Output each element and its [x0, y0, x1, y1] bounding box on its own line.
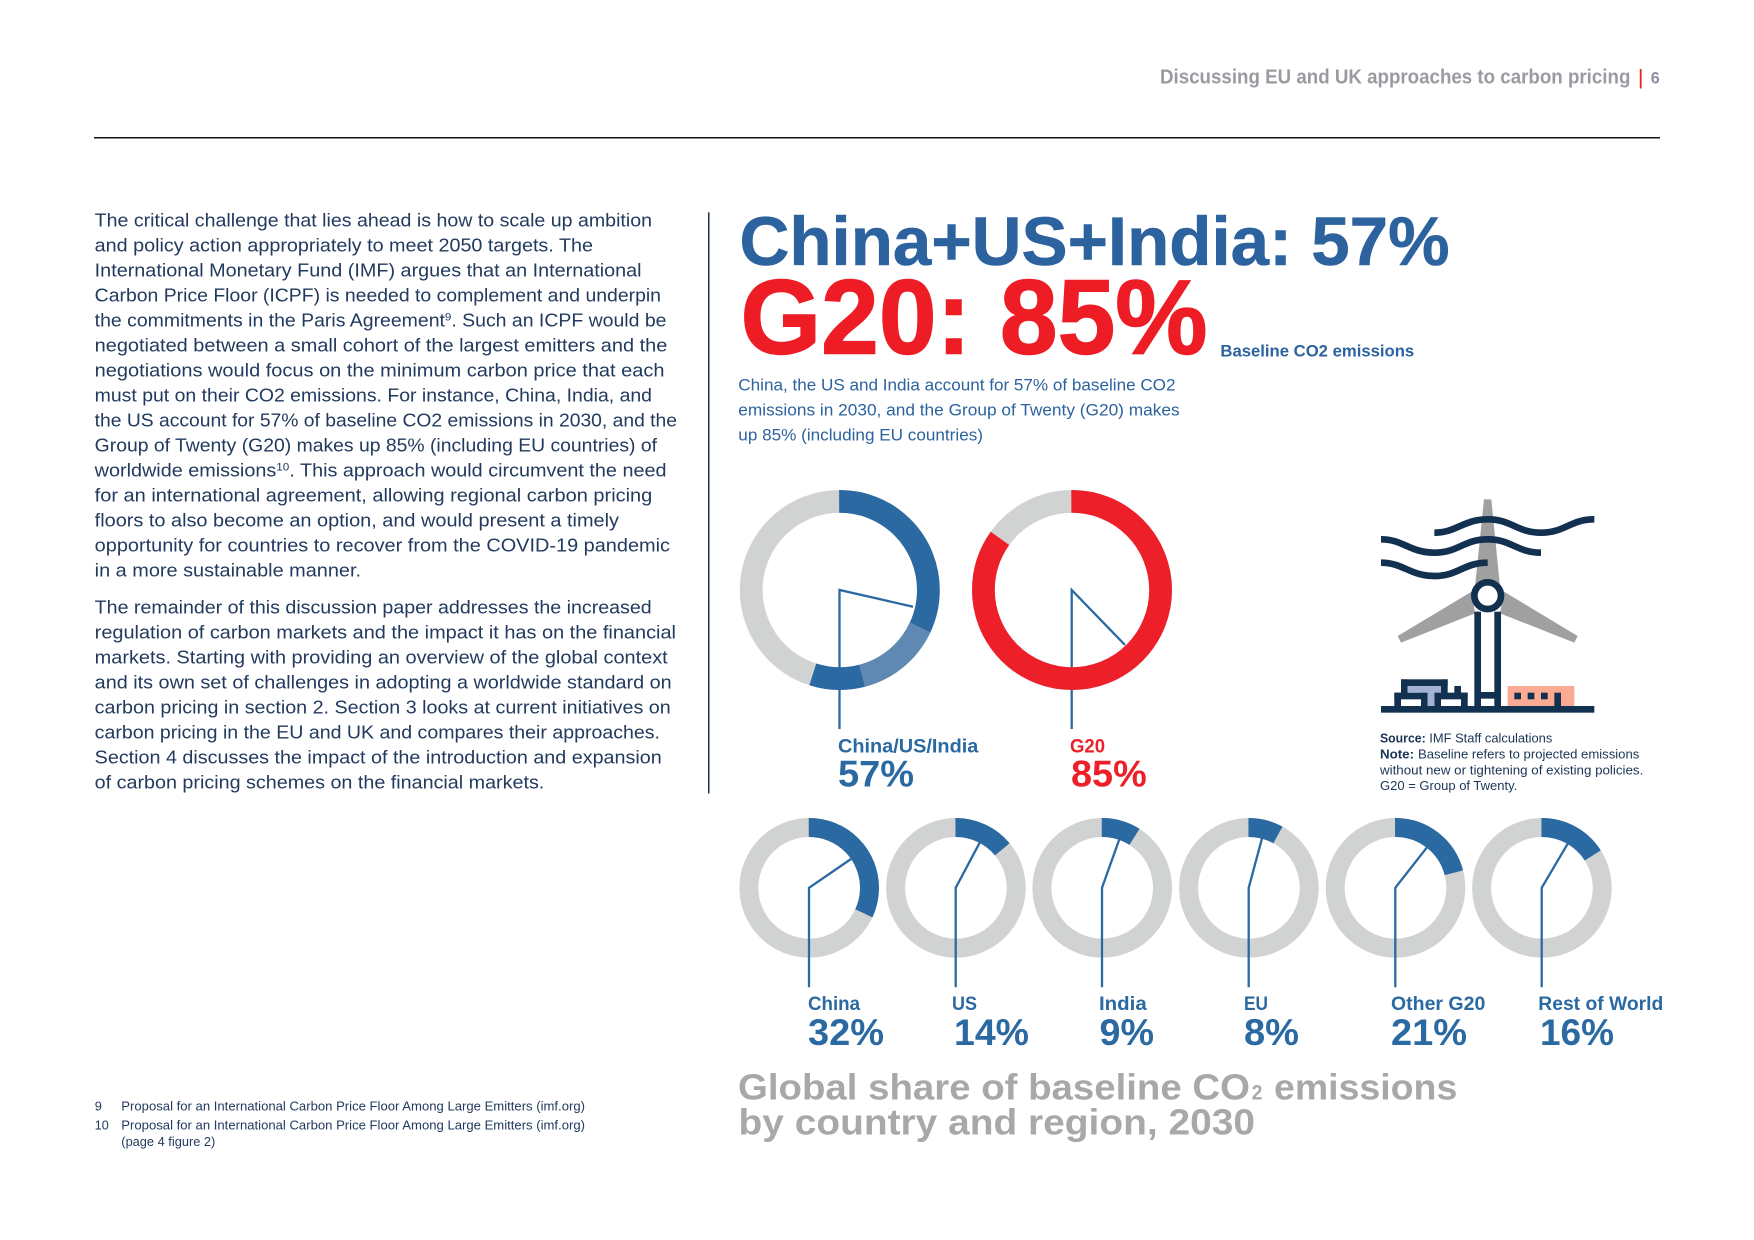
small donut: Other G20 21%: Other G20	[1391, 994, 1485, 1015]
chart title: Global share of baseline CO2 emissions by country and region, 2030: by country and region, 2030	[738, 1101, 1255, 1142]
footnotes: 9	[95, 1099, 102, 1114]
small donut: China 32%	[749, 828, 884, 1053]
text block: first paragraph	[94, 210, 677, 581]
small donut: Rest of World 16%	[1482, 828, 1663, 1053]
chart title: Global share of baseline CO2 emissions by country and region, 2030: emissions	[1274, 1066, 1457, 1107]
text block: second paragraph: The remainder of this discussion paper addresses the increased	[95, 596, 652, 617]
label: China/US/India 57%	[838, 736, 979, 795]
text block: first paragraph: worldwide emissions	[95, 460, 265, 481]
small donut: EU 8%	[1189, 828, 1309, 1053]
text block: first paragraph: opportunity for countries to recover from the COVID-19 pandemic	[95, 535, 670, 556]
text block: second paragraph: carbon pricing in section 2. Section 3 looks at current initiatives on	[95, 696, 671, 717]
footnotes: (page 4 figure 2)	[121, 1134, 215, 1149]
footnotes: 10	[95, 1117, 109, 1132]
source and note: Source:	[1380, 731, 1426, 746]
small donut: India 9%: India	[1099, 994, 1147, 1015]
text block: first paragraph: Carbon Price Floor (ICPF) is needed to complement and underpin	[95, 285, 661, 306]
text block: first paragraph: International Monetary Fund (IMF) argues that an International	[95, 260, 642, 281]
text block: first paragraph: 9	[445, 312, 451, 324]
text block: first paragraph: the US account for 57% of baseline CO2 emissions in 2030, and the	[95, 410, 677, 431]
text block: first paragraph: negotiated between a small cohort of the largest emitters and the	[95, 335, 667, 356]
small donut: Rest of World 16%: 16%	[1540, 1012, 1614, 1053]
donut chart: G20 85%	[983, 501, 1161, 729]
text block: first paragraph: negotiations would focus on the minimum carbon price that each	[95, 360, 664, 381]
caption: Baseline CO2 emissions: Baseline CO2 emissions	[1220, 343, 1414, 361]
footnotes: Proposal for an International Carbon Price Floor Among Large Emitters (imf.org)	[121, 1117, 585, 1132]
text block: first paragraph: Group of Twenty (G20) makes up 85% (including EU countries) of	[95, 435, 658, 456]
chart title: Global share of baseline CO2 emissions by country and region, 2030	[738, 1066, 1457, 1142]
footnotes: Proposal for an International Carbon Price Floor Among Large Emitters (imf.org)	[121, 1099, 585, 1114]
text block: first paragraph: in a more sustainable manner.	[95, 560, 361, 581]
small donut: Other G20 21%	[1335, 828, 1485, 1053]
text block: second paragraph: of carbon pricing schemes on the financial markets.	[95, 771, 544, 792]
chart title: Global share of baseline CO2 emissions by country and region, 2030: 2	[1252, 1081, 1262, 1104]
source and note: Baseline refers to projected emissions	[1418, 747, 1640, 762]
source and note: without new or tightening of existing policies.	[1379, 762, 1643, 777]
text block: first paragraph: 10	[276, 462, 289, 474]
donut chart: China/US/India 57%	[751, 501, 928, 729]
text block: first paragraph: The critical challenge that lies ahead is how to scale up ambition	[95, 210, 652, 231]
text block: second paragraph: and its own set of challenges in adopting a worldwide standard on	[95, 671, 672, 692]
text block: first paragraph: the commitments in the Paris Agreement	[95, 310, 430, 331]
text block: first paragraph: for an international agreement, allowing regional carbon pricing	[95, 485, 652, 506]
text block: first paragraph: and policy action appropriately to meet 2050 targets. The	[95, 235, 593, 256]
text block: second paragraph	[95, 596, 676, 792]
text block: first paragraph: floors to also become an option, and would present a timely	[95, 510, 620, 531]
small donut: US 14%	[896, 828, 1029, 1053]
header: running title and page number: 6	[1651, 69, 1660, 88]
text block: headline description: emissions in 2030, and the Group of Twenty (G20) makes	[738, 401, 1180, 420]
small donut: Other G20 21%: 21%	[1391, 1012, 1467, 1053]
source and note: Note:	[1380, 747, 1414, 762]
headline: G20 85%: G20: 85%	[740, 258, 1208, 376]
small donut: Rest of World 16%: Rest of World	[1538, 994, 1663, 1015]
header: running title and page number: Discussing EU and UK approaches to carbon pricing	[1160, 67, 1630, 89]
source and note	[1379, 731, 1643, 793]
small donut: China 32%: 32%	[808, 1012, 884, 1053]
text block: headline description: China, the US and India account for 57% of baseline CO2	[738, 376, 1176, 395]
small donut: India 9%: 9%	[1100, 1012, 1154, 1053]
small donut: US 14%: 14%	[954, 1012, 1029, 1053]
text block: second paragraph: regulation of carbon markets and the impact it has on the financial	[95, 621, 676, 642]
small donut: China 32%: China	[808, 994, 860, 1015]
chart title: Global share of baseline CO2 emissions by country and region, 2030: Global share of baseline CO	[738, 1066, 1250, 1107]
label: G20 85%: 85%	[1071, 754, 1147, 795]
label: G20 85%	[1070, 736, 1147, 795]
label: China/US/India 57%: China/US/India	[838, 736, 979, 757]
text block: second paragraph: markets. Starting with providing an overview of the global context	[95, 646, 669, 667]
small donut: EU 8%: 8%	[1244, 1012, 1299, 1053]
text block: second paragraph: Section 4 discusses the impact of the introduction and expansion	[95, 746, 662, 767]
footnotes	[95, 1099, 585, 1149]
text block: second paragraph: carbon pricing in the EU and UK and compares their approaches.	[95, 721, 660, 742]
small donut: EU 8%: EU	[1244, 994, 1268, 1015]
small donut: India 9%	[1042, 828, 1162, 1053]
icon: wind turbine with waves and buildings	[1381, 499, 1594, 713]
text block: headline description	[738, 376, 1180, 445]
text block: first paragraph: . This approach would circumvent the need	[289, 460, 666, 481]
headline: China+US+India 57%: China+US+India: 57%	[740, 203, 1450, 280]
text block: headline description: up 85% (including EU countries)	[738, 426, 983, 445]
source and note: IMF Staff calculations	[1429, 731, 1553, 746]
label: G20 85%: G20	[1070, 736, 1105, 757]
text block: first paragraph: . Such an ICPF would be	[451, 310, 666, 331]
small donut: US 14%: US	[952, 994, 977, 1015]
label: China/US/India 57%: 57%	[838, 754, 914, 795]
source and note: G20 = Group of Twenty.	[1380, 778, 1517, 793]
text block: first paragraph: must put on their CO2 emissions. For instance, China, India, and	[95, 385, 652, 406]
